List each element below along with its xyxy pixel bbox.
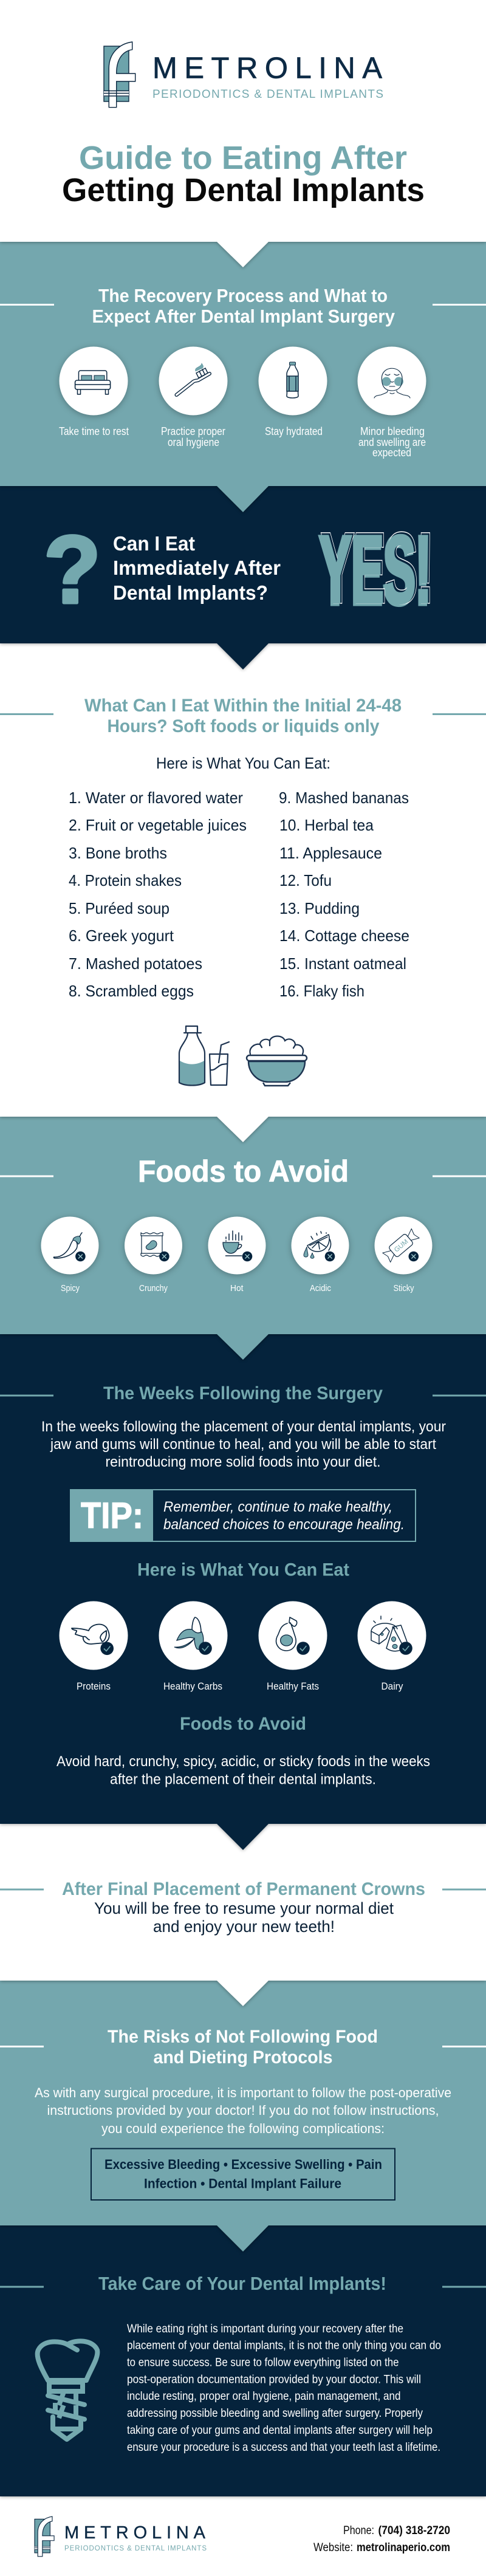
text: resume normal diet: and enjoy your new teeth! (153, 1917, 335, 1936)
food list column 2: 16. Flaky fish (279, 982, 364, 1000)
logo: Metrolina: METROLINA (152, 52, 382, 85)
heading: here is what you can eat: Here is What You Can Eat (137, 1560, 349, 1580)
heading: take care: Take Care of Your Dental Implants! (98, 2273, 386, 2294)
contact details: (704) 318-2720 (378, 2524, 450, 2537)
panel: footer (0, 2496, 486, 2576)
icon: bowl of mashed food (247, 1036, 307, 1086)
icon: dairy cheese: Dairy (382, 1680, 403, 1692)
icon: crunchy chip bag (125, 1216, 182, 1293)
panel: take care of your dental implants (0, 2225, 486, 2499)
callout: complications: Infection • Dental Implant Failure (144, 2176, 341, 2191)
icon: face with swollen cheeks: Minor bleeding (360, 425, 425, 437)
icon: healthy carbs banana (159, 1601, 227, 1692)
icon: water bottle, stay hydrated (259, 346, 327, 437)
icon: bed, take time to rest: Take time to rest (59, 425, 129, 437)
question text (113, 532, 281, 604)
icon: toothbrush, oral hygiene: Practice proper (161, 425, 225, 437)
food list column 1: 2. Fruit or vegetable juices (69, 816, 247, 834)
icon: sticky gum: GUM (393, 1238, 409, 1254)
heading: recovery process: The Recovery Process and What to (98, 285, 388, 306)
paragraph: take care: post-operation documentation provided by your doctor. This will (127, 2372, 421, 2386)
callout: tip: balanced choices to encourage healing. (163, 1516, 405, 1533)
icon: bed, take time to rest (59, 346, 129, 437)
icon: acidic citrus (292, 1216, 349, 1293)
food list column 2: 9. Mashed bananas (279, 789, 409, 807)
icon: hot coffee cup (208, 1216, 266, 1293)
paragraph: take care: to ensure success. Be sure to follow everything listed on the (127, 2356, 399, 2369)
food list column 2: 14. Cottage cheese (279, 927, 409, 945)
icon: healthy fats avocado (259, 1601, 327, 1692)
paragraph: take care: addressing possible bleeding and swelling after surgery. Properly (127, 2406, 423, 2420)
food list column 2: 12. Tofu (279, 871, 332, 889)
heading: risks: and Dieting Protocols (153, 2047, 333, 2067)
heading: foods to avoid: Foods to Avoid (180, 1714, 306, 1734)
logo: Metrolina footer: METROLINA (64, 2523, 206, 2543)
heading: after final placement: After Final Placement of Permanent Crowns (62, 1879, 425, 1899)
icon: sticky gum: Sticky (394, 1283, 414, 1293)
heading: recovery process: Expect After Dental Implant Surgery (92, 306, 395, 327)
food list column 2 (279, 789, 409, 1000)
logo: Metrolina footer (35, 2516, 207, 2557)
paragraph: take care: taking care of your gums and dental implants after surgery will help (127, 2424, 433, 2437)
icon: spicy chili: Spicy (61, 1283, 80, 1293)
icon: face with swollen cheeks: and swelling are (358, 436, 426, 448)
logo: Metrolina (104, 42, 383, 108)
callout: complications: Excessive Bleeding • Excessive Swelling • Pain (104, 2157, 382, 2172)
panel: after final placement (0, 1879, 486, 2007)
paragraph: foods to avoid (56, 1753, 430, 1787)
icon: healthy fats avocado: Healthy Fats (267, 1680, 319, 1692)
callout: complications (91, 2148, 395, 2200)
heading: foods to avoid: Foods to Avoid (138, 1154, 349, 1188)
heading: what can I eat: What Can I Eat Within the Initial 24-48 (84, 696, 402, 716)
paragraph: take care (127, 2322, 441, 2454)
heading: weeks following (0, 1383, 486, 1403)
callout: tip (70, 1489, 416, 1542)
paragraph: take care: include resting, proper oral hygiene, pain management, and (127, 2389, 401, 2403)
food list column 1: 4. Protein shakes (69, 871, 182, 889)
contact details: metrolinaperio.com (357, 2541, 450, 2554)
food list column 2: 10. Herbal tea (279, 816, 374, 834)
title: Guide to Eating After (79, 140, 407, 176)
paragraph: foods to avoid: Avoid hard, crunchy, spicy, acidic, or sticky foods in the weeks (56, 1753, 430, 1770)
food list column 1 (69, 789, 247, 1000)
panel: can I eat immediately (0, 486, 486, 671)
icon: healthy carbs banana: Healthy Carbs (163, 1680, 222, 1692)
icon: water bottle, stay hydrated: Stay hydrated (265, 425, 323, 437)
panel: recovery process (0, 242, 486, 512)
icon: dairy cheese (357, 1601, 426, 1692)
callout: tip: Remember, continue to make healthy, (163, 1499, 392, 1515)
food list column 2: 15. Instant oatmeal (279, 954, 406, 973)
food list column 1: 8. Scrambled eggs (69, 982, 194, 1000)
panel: weeks following the surgery (0, 1334, 486, 1852)
icon: sticky gum (374, 1216, 433, 1293)
logo: Metrolina: PERIODONTICS & DENTAL IMPLANTS (152, 88, 383, 101)
title (62, 140, 425, 208)
icon: question mark: ? (44, 516, 101, 623)
paragraph: take care: ensure your procedure is a success and that your teeth last a lifetime. (127, 2441, 440, 2454)
callout: tip: TIP: (81, 1495, 143, 1536)
food list column 2: 13. Pudding (279, 899, 360, 917)
contact details: Phone: (343, 2524, 374, 2537)
contact details: Website: (313, 2541, 353, 2554)
icon: proteins chicken: Proteins (77, 1680, 111, 1692)
heading: recovery process (0, 285, 486, 327)
icon: hot coffee cup: Hot (230, 1283, 244, 1293)
subheading: here is what you can eat: Here is What You Can Eat: (156, 754, 330, 772)
heading: risks: The Risks of Not Following Food (108, 2027, 378, 2047)
heading: what can I eat (0, 696, 486, 736)
panel: risks of not following protocols (0, 1981, 486, 2252)
paragraph: risks: you could experience the following complications: (101, 2121, 385, 2136)
food list column 1: 5. Puréed soup (69, 899, 169, 917)
food list column 1: 6. Greek yogurt (69, 927, 174, 945)
panel: foods to avoid (0, 1117, 486, 1360)
answer: YES! (319, 513, 434, 625)
text: resume normal diet: You will be free to resume your normal diet (94, 1899, 394, 1917)
paragraph: take care: While eating right is important during your recovery after the (127, 2322, 403, 2335)
heading: what can I eat: Hours? Soft foods or liquids only (107, 716, 380, 736)
paragraph: foods to avoid: after the placement of their dental implants. (110, 1772, 376, 1787)
icon: proteins chicken (60, 1601, 128, 1692)
icon: milk bottle and glass (179, 1026, 229, 1085)
paragraph: weeks following (41, 1419, 446, 1470)
panel: initial 24-48 hours soft foods (0, 696, 486, 1143)
logo: Metrolina footer: PERIODONTICS & DENTAL IMPLANTS (64, 2545, 207, 2552)
question text: Immediately After (113, 557, 281, 579)
food list column 1: 1. Water or flavored water (69, 789, 243, 807)
icon: toothbrush, oral hygiene (159, 346, 227, 448)
paragraph: weeks following: reintroducing more solid foods into your diet. (106, 1454, 380, 1470)
icon: face with swollen cheeks (357, 346, 426, 459)
food list column 1: 7. Mashed potatoes (69, 954, 202, 973)
icon: face with swollen cheeks: expected (372, 447, 411, 459)
icon: spicy chili (41, 1216, 98, 1293)
heading: take care (0, 2273, 486, 2294)
icon: acidic citrus: Acidic (310, 1283, 331, 1293)
food list column 1: 3. Bone broths (69, 844, 167, 862)
question text: Dental Implants? (113, 581, 268, 604)
icon: crunchy chip bag: Crunchy (139, 1283, 168, 1293)
paragraph: weeks following: jaw and gums will continue to heal, and you will be able to start (50, 1436, 436, 1453)
paragraph: take care: placement of your dental implants, it is not the only thing you can do (127, 2339, 441, 2352)
paragraph: risks (35, 2085, 451, 2136)
text: resume normal diet (94, 1899, 394, 1936)
contact details (313, 2524, 450, 2554)
icon: dental implant (38, 2341, 97, 2439)
heading: foods to avoid (0, 1154, 486, 1188)
question text: Can I Eat (113, 532, 195, 555)
title: Getting Dental Implants (62, 172, 425, 208)
food list column 2: 11. Applesauce (279, 844, 382, 862)
paragraph: weeks following: In the weeks following the placement of your dental implants, your (41, 1419, 446, 1435)
heading: weeks following: The Weeks Following the Surgery (103, 1383, 383, 1403)
icon: toothbrush, oral hygiene: oral hygiene (168, 436, 219, 448)
paragraph: risks: instructions provided by your doctor! If you do not follow instructions, (47, 2103, 439, 2118)
panel: header with logo and title (0, 41, 486, 269)
paragraph: risks: As with any surgical procedure, it is important to follow the post-operative (35, 2085, 451, 2100)
heading: risks (0, 2027, 486, 2067)
